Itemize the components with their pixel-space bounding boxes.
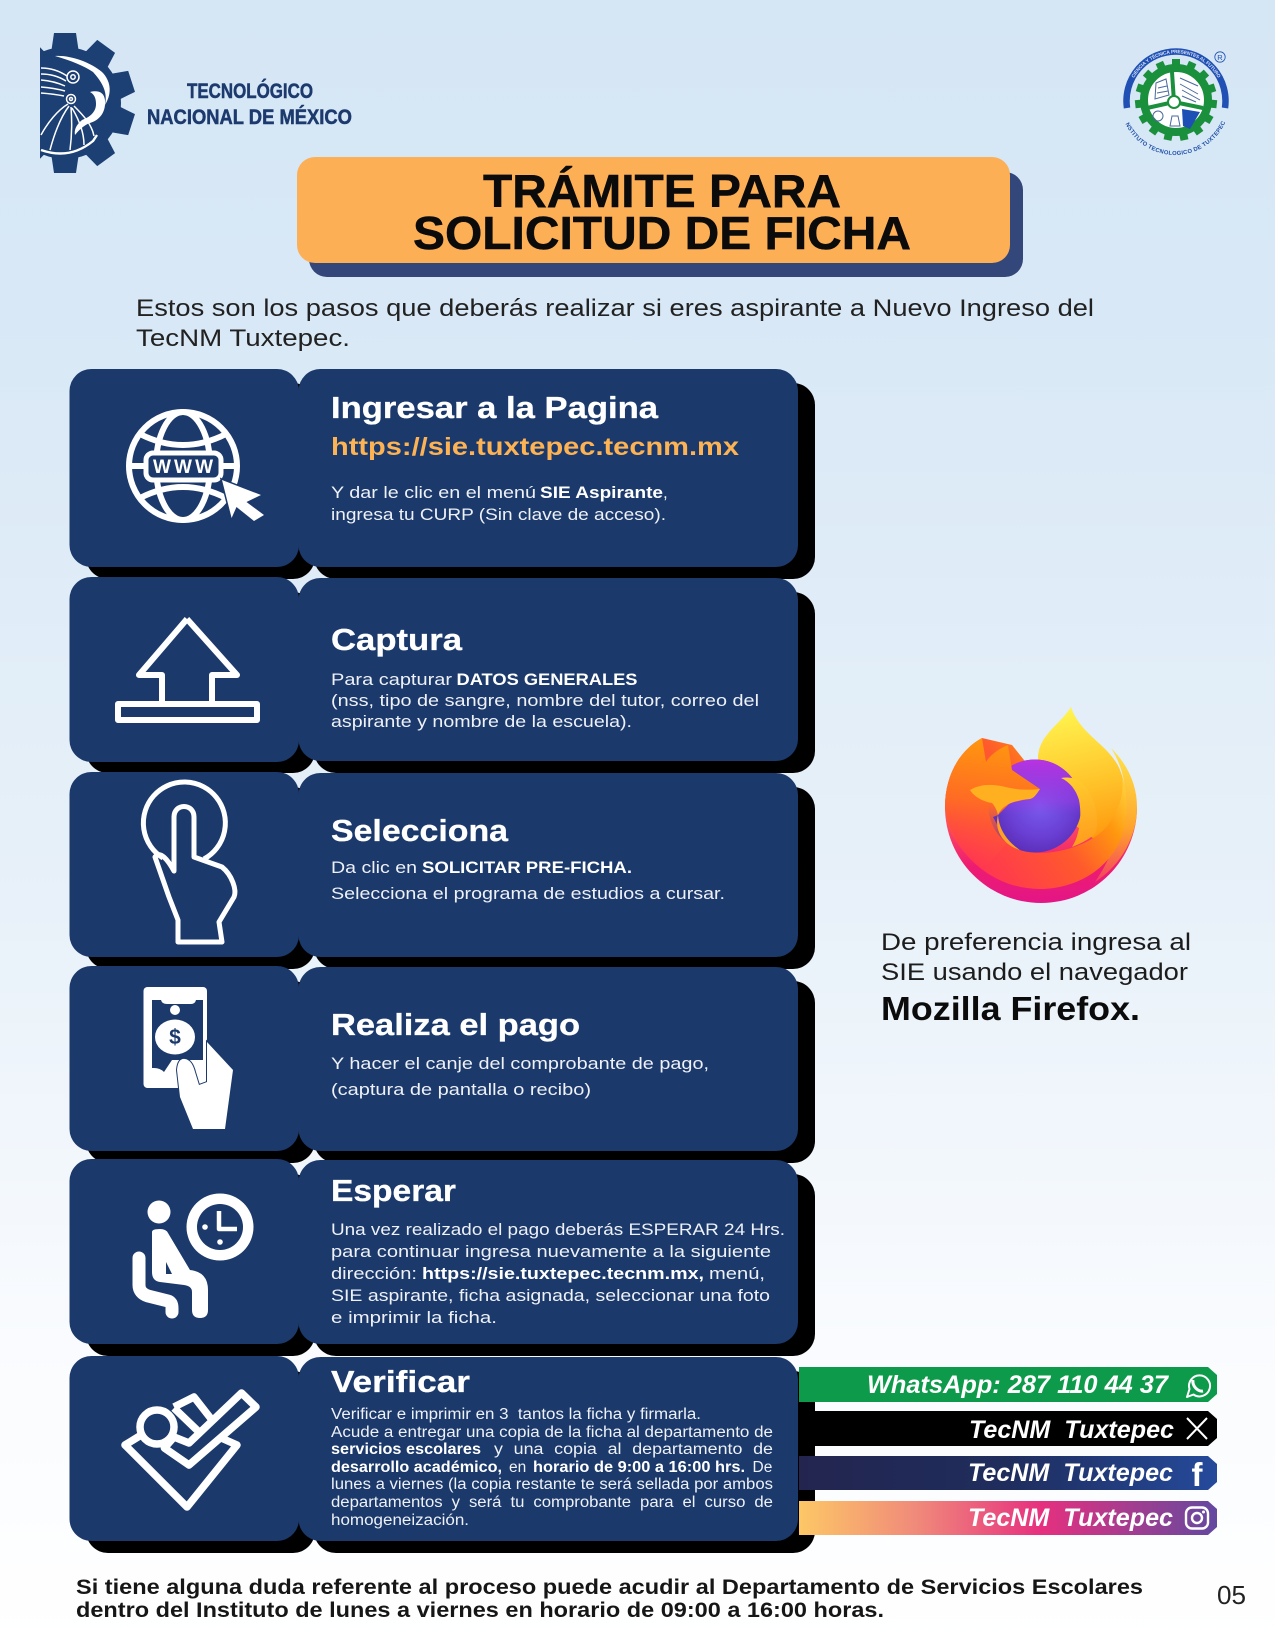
logo: Instituto Tecnológico de Tuxtepec: INSTITUTO TECNOLOGICO DE TUXTEPEC [1126, 121, 1225, 156]
step 6 text [331, 1364, 773, 1529]
step 4 text [331, 1007, 709, 1099]
step 1 text: SIE Aspirante [540, 483, 663, 502]
step 5 text: dirección: [331, 1264, 417, 1283]
whatsapp bar [799, 1367, 1217, 1402]
footer note: Si tiene alguna duda referente al proceso puede acudir al Departamento de Servicios Escolares [76, 1575, 1143, 1599]
step 6 text: servicios escolares [331, 1441, 481, 1458]
step 5 text: para continuar ingresa nuevamente a la siguiente [331, 1242, 771, 1261]
icon: hand holding bill: $ [169, 1026, 181, 1049]
step 3 text: SOLICITAR PRE-FICHA. [422, 858, 632, 877]
title [413, 165, 911, 259]
step 5 text: e imprimir la ficha. [331, 1308, 497, 1327]
step 6 text: lunes a viernes (la copia restante te será sellada por ambos [331, 1476, 773, 1493]
panel: step 2 [70, 577, 815, 773]
icon: globe with cursor [129, 412, 264, 521]
footer note: dentro del Instituto de lunes a viernes en horario de 09:00 a 16:00 horas. [76, 1598, 884, 1622]
step 5 text: Esperar [331, 1173, 456, 1208]
icon: gear with eagle head [40, 33, 135, 173]
step 1 text: Y dar le clic en el menú [331, 483, 536, 502]
step 1 text: ingresa tu CURP (Sin clave de acceso). [331, 505, 666, 524]
step 2 text: Captura [331, 622, 463, 657]
panel: step 6 [70, 1356, 815, 1553]
step 6 text: en [509, 1459, 526, 1476]
intro text [136, 295, 1094, 352]
step 5 text: Una vez realizado el pago deberás ESPERAR 24 Hrs. [331, 1220, 785, 1239]
step 3 text [331, 813, 725, 903]
step 6 text: Acude a entregar una copia de la ficha al departamento de [331, 1424, 773, 1441]
instagram bar: TecNM Tuxtepec [968, 1504, 1173, 1532]
logo: Instituto Tecnológico de Tuxtepec: R [1217, 53, 1223, 62]
X bar [815, 1411, 1217, 1446]
step 6 text: y una copia al departamento de [494, 1441, 773, 1458]
facebook bar [799, 1456, 1217, 1493]
step 1 text: https://sie.tuxtepec.tecnm.mx [331, 433, 739, 461]
icon: Firefox logo [945, 707, 1137, 903]
icon: verification check [125, 1393, 256, 1507]
firefox note text: Mozilla Firefox. [881, 990, 1140, 1027]
logo: Instituto Tecnológico de Tuxtepec [1123, 48, 1229, 156]
instagram bar [799, 1501, 1217, 1535]
step 6 text: De [752, 1459, 772, 1476]
step 1 text: , [663, 483, 668, 502]
step 6 text: Verificar [331, 1364, 470, 1399]
step 2 text [331, 622, 759, 731]
logo text: TECNOLÓGICO [187, 79, 313, 103]
firefox recommendation [881, 707, 1191, 1027]
step 5 text: menú, [709, 1264, 765, 1283]
title: TRÁMITE PARA [483, 165, 841, 217]
facebook bar: TecNM Tuxtepec [968, 1459, 1173, 1487]
icon: seated person and clock [139, 1194, 254, 1318]
whatsapp bar: WhatsApp: 287 110 44 37 [867, 1371, 1169, 1399]
step 4 text: Realiza el pago [331, 1007, 580, 1042]
panel: step 3 [70, 772, 815, 969]
step 2 text: aspirante y nombre de la escuela). [331, 712, 632, 731]
title: SOLICITUD DE FICHA [413, 207, 911, 259]
firefox note text [881, 929, 1191, 1027]
firefox note text: De preferencia ingresa al [881, 929, 1191, 956]
intro text: TecNM Tuxtepec. [136, 325, 350, 352]
icon: upload arrow [118, 619, 257, 720]
step 6 text: desarrollo académico, [331, 1459, 502, 1476]
step 2 text: DATOS GENERALES [456, 670, 638, 689]
panel: step 1 [70, 369, 815, 579]
step 6 text: departamentos y será tu comprobante para el curso de [331, 1494, 773, 1511]
icon: finger tapping [143, 782, 235, 942]
panel: step 5 [70, 1159, 815, 1356]
icon: hand holding bill [144, 987, 233, 1129]
step 5 text: SIE aspirante, ficha asignada, seleccionar una foto [331, 1286, 770, 1305]
step 5 text: https://sie.tuxtepec.tecnm.mx, [422, 1264, 704, 1283]
logo text [147, 79, 352, 129]
step 1 text [331, 390, 739, 524]
logo text: NACIONAL DE MÉXICO [147, 106, 352, 129]
panel: step 4 [70, 966, 815, 1163]
firefox note text: SIE usando el navegador [881, 959, 1188, 986]
step 2 text: (nss, tipo de sangre, nombre del tutor, correo del [331, 691, 759, 710]
step 3 text: Selecciona el programa de estudios a cursar. [331, 884, 725, 903]
step 6 text: horario de 9:00 a 16:00 hrs. [533, 1459, 745, 1476]
logo: Tecnológico Nacional de México [9, 33, 352, 173]
facebook bar: f [1192, 1456, 1204, 1493]
X bar: TecNM Tuxtepec [969, 1416, 1174, 1444]
intro text: Estos son los pasos que deberás realizar si eres aspirante a Nuevo Ingreso del [136, 295, 1094, 322]
step 4 text: Y hacer el canje del comprobante de pago, [331, 1054, 709, 1073]
step 5 text [331, 1173, 785, 1327]
step 6 text: Verificar e imprimir en 3 tantos la ficha y firmarla. [331, 1406, 701, 1423]
page number: 05 [1217, 1580, 1246, 1610]
title banner [297, 157, 1023, 277]
icon: globe with cursor: WWW [153, 457, 213, 478]
footer note [76, 1575, 1143, 1622]
step 4 text: (captura de pantalla o recibo) [331, 1080, 591, 1099]
step 6 text: homogeneización. [331, 1512, 469, 1529]
social media bars [799, 1367, 1217, 1535]
step 2 text: Para capturar [331, 670, 452, 689]
step 1 text: Ingresar a la Pagina [331, 390, 659, 425]
step 3 text: Da clic en [331, 858, 417, 877]
logo: Instituto Tecnológico de Tuxtepec: CIENCIA Y TÉCNICA PRESENTES AL FUTURO [1132, 50, 1220, 78]
step 3 text: Selecciona [331, 813, 509, 848]
